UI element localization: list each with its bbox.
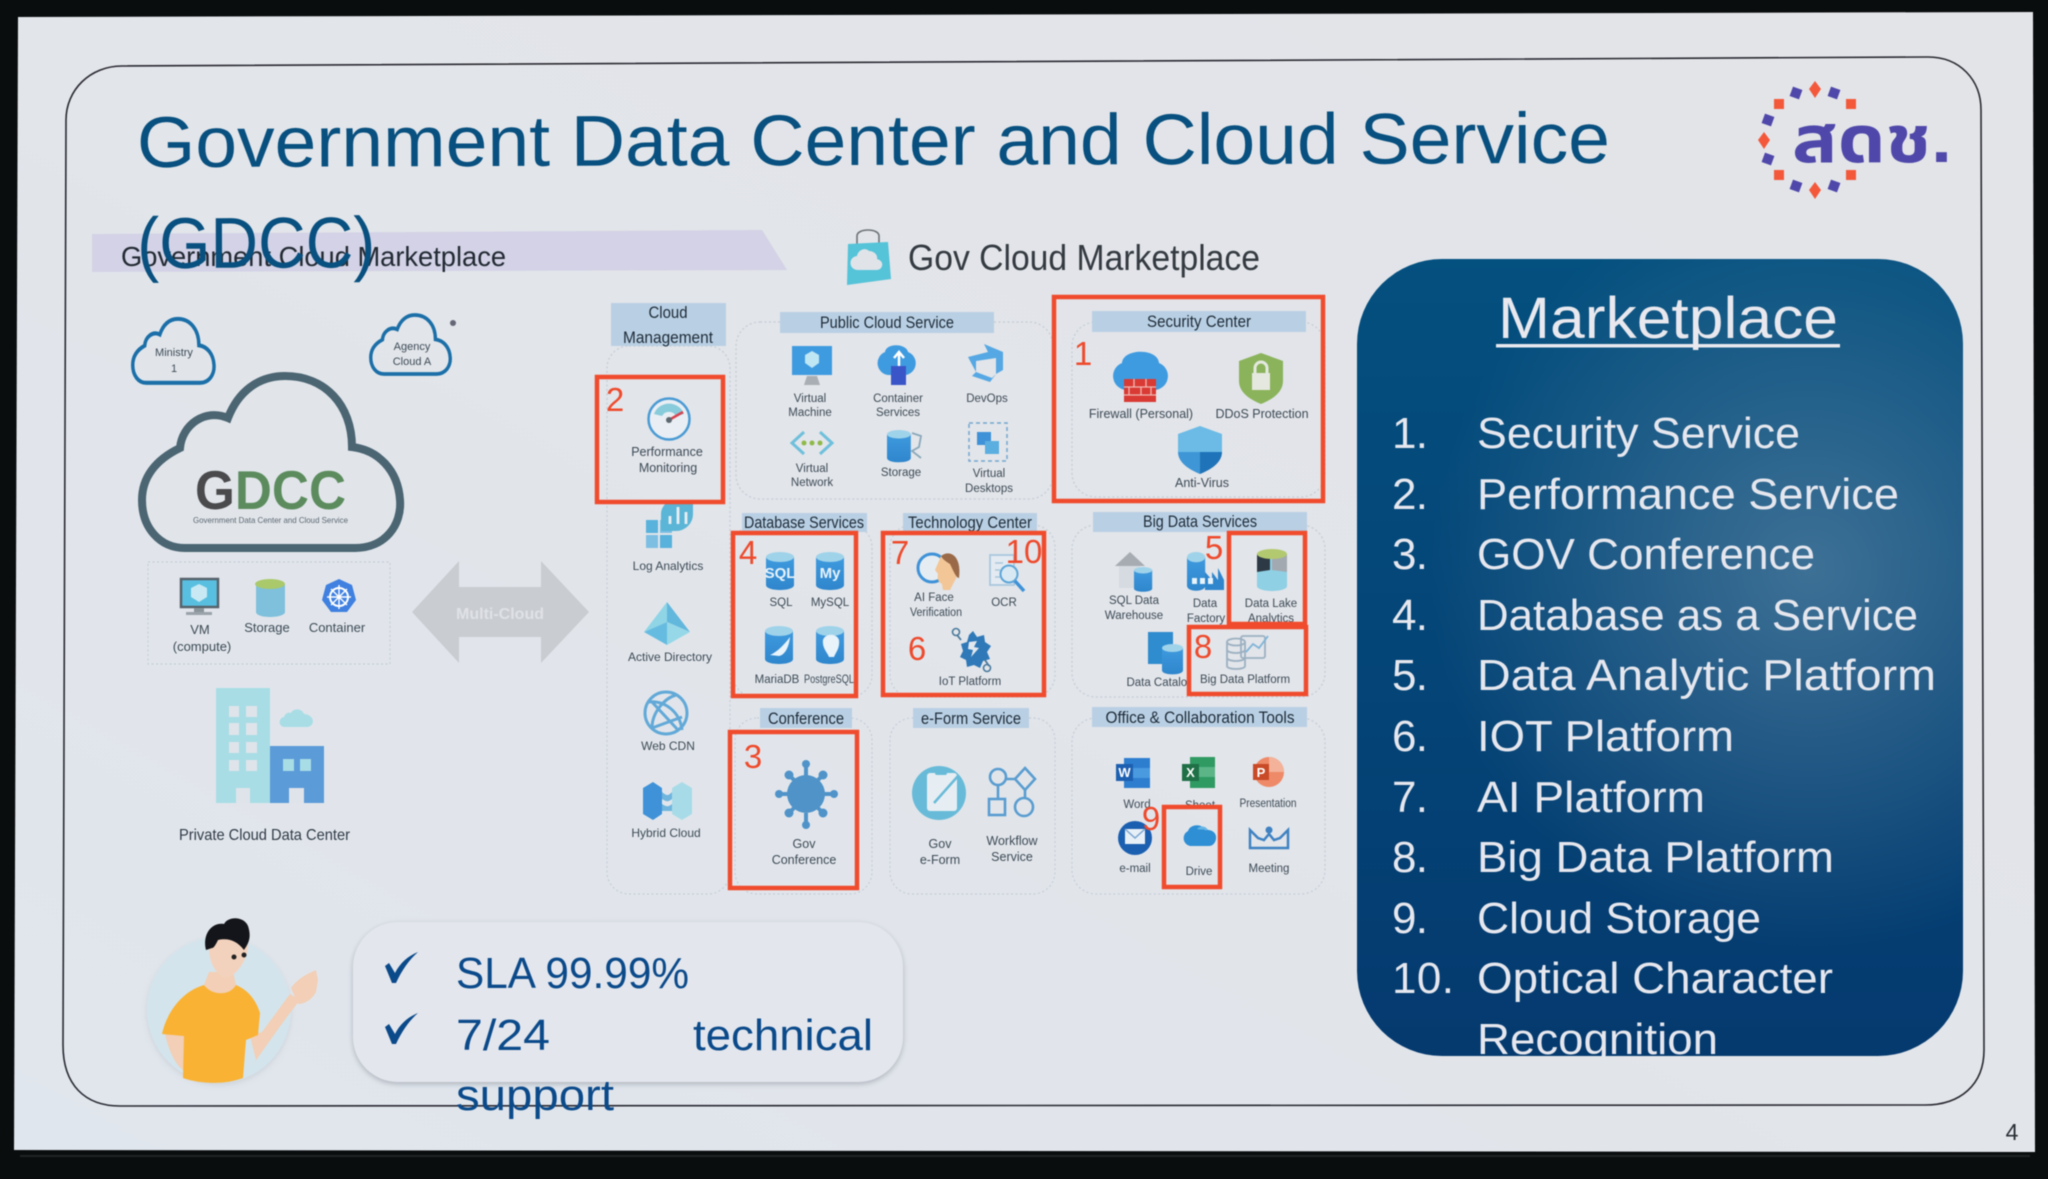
panel: cloud management: Hybrid Cloud: [631, 826, 701, 840]
callout markers: red highlight boxes: 3: [744, 738, 762, 775]
panel: office and collaboration tools: Presentation: [1240, 798, 1296, 810]
callout: service guarantees: support: [456, 1071, 614, 1120]
icon: PostgreSQL: [816, 626, 844, 664]
panel: office and collaboration tools: Meeting: [1249, 863, 1289, 875]
marketplace items: 3.: [1392, 530, 1428, 579]
marketplace items: 6.: [1392, 712, 1428, 761]
icon: e-mail: [1118, 821, 1152, 855]
marketplace items: 1.: [1392, 409, 1428, 458]
panel: big data services: Warehouse: [1105, 610, 1163, 622]
GDCC cloud: Government Data Center and Cloud Service: [193, 515, 348, 525]
panel: cloud management: Monitoring: [639, 461, 697, 475]
marketplace items: Performance Service: [1477, 470, 1899, 519]
panel: public cloud service: Virtual: [973, 468, 1005, 480]
marketplace items: Security Service: [1477, 409, 1800, 458]
callout markers: red highlight boxes: 1: [1074, 335, 1092, 372]
panel: big data services: Factory: [1187, 613, 1225, 625]
panel: office and collaboration tools: Office & Collaboration Tools: [1106, 708, 1294, 727]
Agency cloud: Cloud A: [393, 356, 432, 368]
icon: container: [322, 579, 356, 612]
icon: word: W: [1118, 765, 1131, 780]
panel: office and collaboration tools: Drive: [1186, 866, 1212, 878]
marketplace items: [1392, 409, 1936, 1064]
icon: virtual desktops: [969, 423, 1007, 461]
callout markers: red highlight boxes: 7: [891, 534, 909, 571]
panel: public cloud service: Network: [791, 477, 833, 489]
arrow: multi-cloud: Multi-Cloud: [456, 606, 544, 623]
panel: security center: DDoS Protection: [1215, 407, 1309, 421]
panel: security center: Security Center: [1147, 312, 1251, 331]
illustration: support person: [147, 918, 318, 1085]
panel: public cloud service: Services: [876, 407, 920, 419]
title: [137, 99, 1610, 284]
title: (GDCC): [137, 203, 375, 284]
icon: anti-virus shield: [1178, 426, 1222, 474]
callout: service guarantees: technical: [693, 1011, 873, 1060]
callout: service guarantees: SLA 99.99%: [456, 949, 689, 998]
panel: big data services: Big Data Services: [1143, 512, 1257, 531]
panel: technology center: AI Face: [914, 592, 954, 604]
panel: big data services: Big Data Platform: [1200, 674, 1290, 686]
icon: MariaDB: [765, 626, 793, 664]
compute services box: Storage: [244, 620, 290, 635]
callout: service guarantees: 7/24: [456, 1011, 550, 1060]
icon: MySQL: [816, 552, 844, 590]
icon: storage cylinder: [255, 579, 285, 617]
icon: gov e-form: [912, 766, 966, 820]
panel: security center: [1072, 311, 1325, 497]
panel: conference: Gov: [793, 837, 816, 851]
marketplace items: 8.: [1392, 833, 1428, 882]
icon: private cloud building: [216, 688, 324, 803]
marketplace items: Cloud Storage: [1477, 894, 1761, 943]
panel: conference: Conference: [772, 853, 836, 867]
marketplace items: Database as a Service: [1477, 591, 1918, 640]
panel: technology center: Verification: [910, 607, 962, 619]
panel: e-form service: Service: [991, 850, 1033, 864]
panel: e-form service: Gov: [929, 837, 952, 851]
callout markers: red highlight boxes: 2: [606, 381, 624, 418]
panel: marketplace list: [1357, 259, 1963, 1064]
panel: public cloud service: Storage: [881, 467, 921, 479]
icon: active directory: [644, 602, 690, 645]
panel: technology center: [890, 513, 1055, 697]
Ministry cloud: [133, 319, 214, 383]
panel: database services: SQL: [769, 597, 793, 609]
marketplace items: Recognition: [1477, 1015, 1718, 1064]
panel: office and collaboration tools: [1072, 707, 1325, 894]
callout markers: red highlight boxes: [597, 297, 1323, 888]
panel: security center: Anti-Virus: [1175, 476, 1229, 490]
icon: SQL: [765, 552, 795, 590]
icon: SQL data warehouse: [1115, 552, 1152, 592]
panel: e-form service: Workflow: [986, 834, 1039, 848]
icon: MySQL: My: [820, 565, 841, 582]
panel: e-form service: e-Form: [920, 853, 960, 867]
icon: data catalog: [1148, 632, 1183, 674]
icon: data factory: [1187, 552, 1224, 591]
icon: powerpoint: [1253, 757, 1284, 787]
panel: big data services: Analytics: [1248, 613, 1294, 625]
panel: database services: MariaDB: [755, 674, 800, 686]
Agency cloud: Agency: [394, 341, 431, 353]
icon: shopping bag: [847, 230, 891, 285]
icon: big data platform: [1227, 636, 1268, 669]
band heading: Government Cloud Marketplace: [121, 241, 506, 272]
panel: big data services: Data: [1193, 598, 1218, 610]
panel: cloud management: [607, 303, 730, 894]
panel: big data services: [1072, 512, 1325, 697]
panel: database services: Database Services: [744, 513, 864, 532]
icon: virtual network: [792, 432, 832, 454]
compute services box: (compute): [173, 639, 231, 654]
GDCC cloud: [142, 376, 400, 548]
marketplace items: GOV Conference: [1477, 530, 1815, 579]
icon: VM monitor: [181, 579, 218, 615]
panel: public cloud service: Virtual: [796, 463, 828, 475]
title: Government Data Center and Cloud Service: [137, 99, 1610, 183]
Agency cloud: [371, 315, 456, 374]
icon: DDoS shield: [1239, 353, 1283, 404]
icon: data lake analytics: [1257, 549, 1287, 591]
panel: office and collaboration tools: e-mail: [1119, 863, 1151, 875]
callout markers: red highlight boxes: 5: [1205, 529, 1223, 566]
panel: public cloud service: DevOps: [966, 393, 1008, 405]
panel: public cloud service: Public Cloud Service: [820, 313, 954, 332]
icon: SQL: SQL: [765, 565, 795, 582]
panel: public cloud service: Machine: [788, 407, 832, 419]
panel: technology center: IoT Platform: [939, 676, 1001, 688]
icon: firewall: [1113, 352, 1168, 402]
page number: 4: [2006, 1119, 2019, 1145]
panel: technology center: OCR: [991, 597, 1017, 609]
icon: word: [1116, 758, 1150, 788]
panel: public cloud service: Container: [873, 393, 923, 405]
marketplace items: 2.: [1392, 470, 1428, 519]
panel: public cloud service: Virtual: [794, 393, 826, 405]
marketplace items: 9.: [1392, 894, 1428, 943]
panel: e-form service: [890, 708, 1055, 894]
callout markers: red highlight boxes: 10: [1006, 533, 1042, 570]
icon: powerpoint: P: [1257, 765, 1266, 780]
icon: excel: [1182, 757, 1215, 788]
panel: cloud management: Web CDN: [641, 739, 695, 753]
marketplace items: Optical Character: [1477, 954, 1833, 1003]
icon: meeting: [1250, 826, 1288, 848]
icon: conference table: [775, 760, 838, 829]
panel: cloud management: Performance: [631, 445, 703, 459]
panel: big data services: Data Catalog: [1126, 677, 1194, 689]
panel: e-form service: e-Form Service: [921, 709, 1021, 728]
panel: cloud management: Management: [623, 328, 713, 347]
panel: office and collaboration tools: Word: [1123, 799, 1151, 811]
icon: virtual machine: [792, 346, 832, 385]
marketplace items: IOT Platform: [1477, 712, 1734, 761]
icon: workflow: [989, 768, 1035, 816]
panel: big data services: SQL Data: [1109, 595, 1160, 607]
marketplace items: AI Platform: [1477, 773, 1705, 822]
panel: cloud management: Log Analytics: [633, 559, 703, 573]
icon: excel: X: [1186, 765, 1195, 780]
panel: public cloud service: [736, 312, 1053, 499]
arrow: multi-cloud: [412, 561, 589, 663]
marketplace items: 10.: [1392, 954, 1454, 1003]
panel: conference: Conference: [768, 709, 844, 728]
icon: hybrid cloud: [643, 782, 692, 820]
marketplace items: 4.: [1392, 591, 1428, 640]
icon: storage: [887, 430, 921, 462]
check marks: [385, 952, 418, 1044]
panel: security center: Firewall (Personal): [1089, 407, 1193, 421]
marketplace items: 5.: [1392, 651, 1428, 700]
icon: drive cloud: [1184, 825, 1216, 846]
logo: สดช.: [1792, 102, 1952, 176]
callout markers: red highlight boxes: 9: [1142, 800, 1160, 837]
private cloud label: Private Cloud Data Center: [179, 827, 351, 844]
callout: service guarantees: [353, 922, 903, 1120]
panel: big data services: Data Lake: [1245, 598, 1297, 610]
icon: performance gauge: [648, 398, 690, 440]
panel: public cloud service: Desktops: [965, 483, 1013, 495]
compute services box: Container: [309, 620, 366, 635]
panel: database services: PostgreSQL: [804, 674, 854, 686]
panel: technology center: Technology Center: [908, 513, 1032, 532]
panel: cloud management: Active Directory: [628, 650, 712, 664]
compute services box: VM: [190, 622, 210, 637]
icon: web CDN: [645, 692, 687, 734]
Ministry cloud: Ministry: [155, 347, 193, 359]
panel: cloud management: Cloud: [648, 303, 688, 322]
marketplace title: Marketplace: [1498, 286, 1838, 351]
icon: OCR: [990, 555, 1024, 591]
purple section band: [92, 230, 787, 272]
icon: log analytics: [646, 500, 693, 548]
callout markers: red highlight boxes: 6: [908, 630, 926, 667]
panel: office and collaboration tools: Sheet: [1185, 800, 1216, 812]
logo: [1758, 81, 1952, 199]
marketplace items: Data Analytic Platform: [1477, 651, 1936, 700]
callout markers: red highlight boxes: 8: [1194, 628, 1212, 665]
marketplace items: Big Data Platform: [1477, 833, 1834, 882]
compute services box: [148, 562, 390, 664]
icon: AI face verification: [918, 553, 959, 590]
callout markers: red highlight boxes: 4: [739, 534, 757, 571]
panel: conference: [735, 708, 872, 894]
icon: IoT platform: [952, 628, 991, 672]
icon: container services: [878, 345, 916, 385]
marketplace items: 7.: [1392, 773, 1428, 822]
Ministry cloud: 1: [171, 363, 177, 375]
panel: database services: [733, 513, 872, 697]
marketplace heading: Gov Cloud Marketplace: [908, 237, 1260, 278]
GDCC cloud: GDCC: [195, 459, 346, 521]
icon: devops: [968, 344, 1003, 382]
panel: database services: MySQL: [811, 597, 850, 609]
